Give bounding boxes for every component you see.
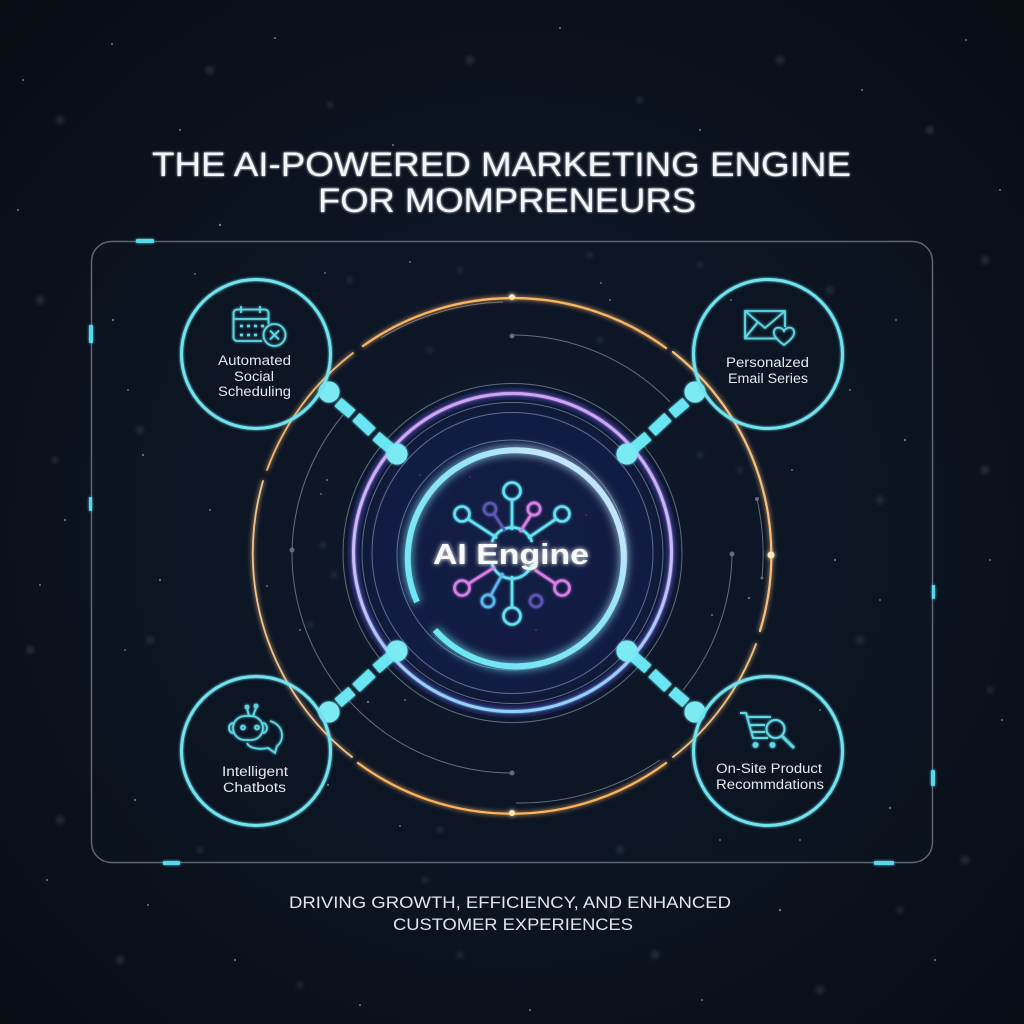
node label: Intelligent [222, 764, 288, 779]
node label [222, 764, 288, 795]
icon: robot chat [229, 704, 282, 753]
node label [218, 353, 291, 399]
node label: Personalzed [726, 355, 809, 370]
main panel frame [92, 242, 932, 862]
node label: On-Site Product [716, 761, 822, 776]
cyan inner ring [408, 450, 624, 666]
node label: Automated [218, 353, 291, 368]
subtitle: DRIVING GROWTH, EFFICIENCY, AND ENHANCED [289, 893, 731, 912]
node label [716, 761, 824, 792]
connector: bottom left [318, 640, 408, 722]
node: On-Site Product Recommendations [694, 676, 842, 826]
icon: calendar with x [234, 306, 286, 346]
thin orbit arcs [290, 302, 764, 803]
central glow [340, 381, 684, 725]
connector: top left [318, 382, 408, 464]
purple ring [354, 394, 672, 712]
network icon [454, 482, 570, 624]
node: Intelligent Chatbots [182, 676, 330, 826]
node label [726, 355, 809, 386]
node label: Email Series [728, 371, 808, 386]
node label: Recommdations [716, 777, 824, 792]
subtitle [289, 893, 731, 934]
node: Automated Social Scheduling [182, 280, 330, 428]
concentric thin rings [343, 384, 682, 722]
subtitle: CUSTOMER EXPERIENCES [393, 915, 633, 934]
center label: AI Engine: AI Engine [433, 539, 589, 571]
icon: cart with magnifier [740, 713, 794, 748]
title: FOR MOMPRENEURS [318, 182, 696, 220]
icon: envelope with heart [745, 311, 794, 345]
node: Personalized Email Series [694, 280, 842, 428]
node label: Scheduling [218, 384, 291, 399]
title: THE AI-POWERED MARKETING ENGINE [152, 146, 851, 184]
node label: Social [234, 369, 274, 384]
connector: top right [616, 382, 706, 464]
orange outer ring [253, 294, 774, 816]
connector: bottom right [616, 640, 706, 722]
panel corner accents [89, 239, 935, 865]
node label: Chatbots [223, 780, 286, 795]
title [152, 146, 851, 220]
